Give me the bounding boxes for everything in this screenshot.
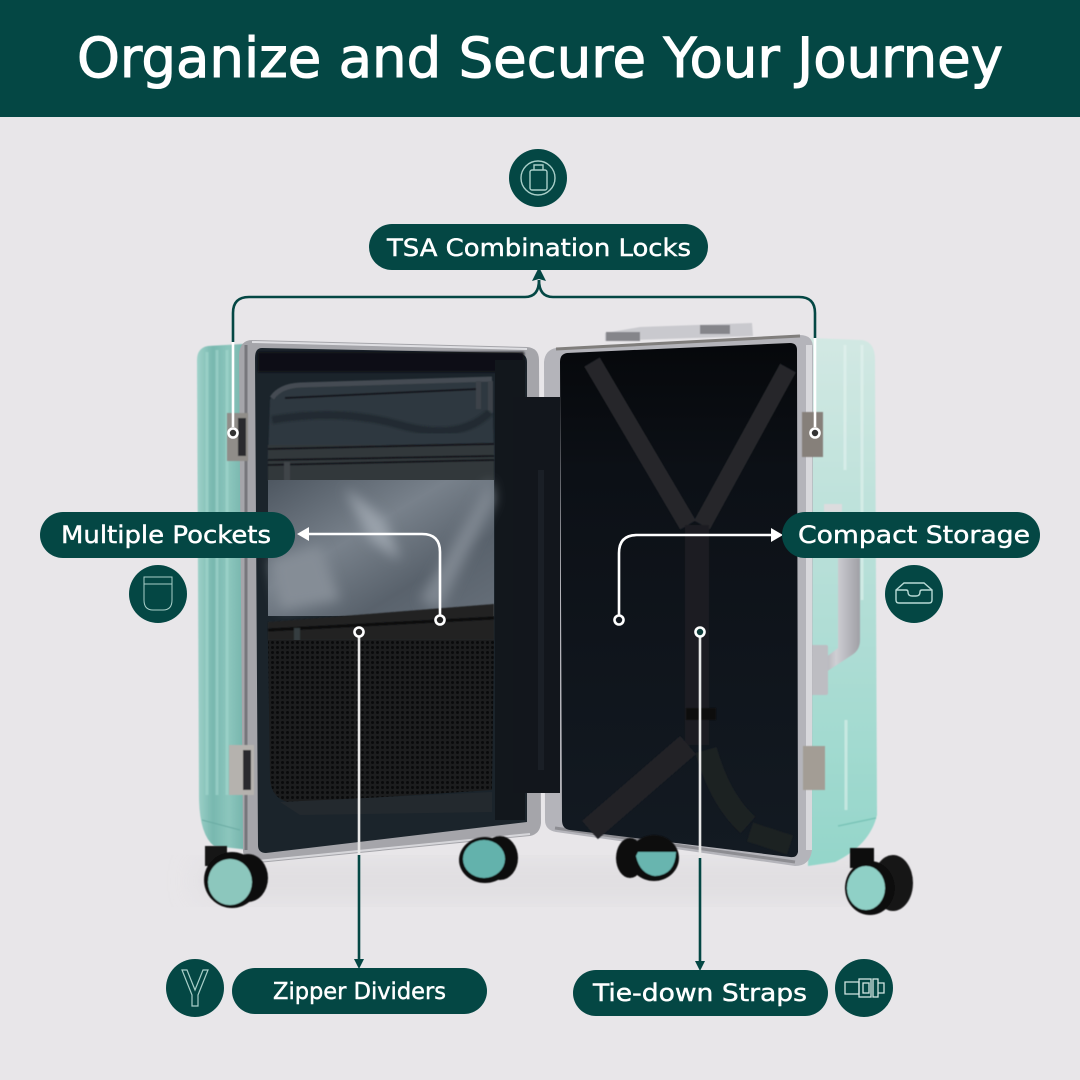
label: Tie-down Straps bbox=[573, 970, 828, 1016]
right shell bbox=[808, 338, 877, 866]
label: Tie-down Straps: Tie-down Straps bbox=[592, 979, 807, 1007]
icon: zipper bbox=[166, 959, 224, 1017]
label: Compact Storage bbox=[782, 512, 1040, 558]
label: TSA Combination Locks: TSA Combination Locks bbox=[386, 234, 691, 262]
suitcase bbox=[197, 323, 913, 915]
side handle bbox=[808, 504, 860, 695]
connector: compact storage bbox=[614, 528, 783, 624]
icon: storage tray bbox=[885, 565, 943, 623]
label: TSA Combination Locks bbox=[369, 224, 708, 270]
lower zipper band bbox=[268, 604, 494, 656]
label: Multiple Pockets: Multiple Pockets bbox=[61, 521, 271, 549]
connector: zipper dividers bbox=[354, 628, 364, 969]
label: Multiple Pockets bbox=[40, 512, 295, 558]
label: Zipper Dividers bbox=[232, 968, 487, 1014]
mesh pocket bbox=[268, 640, 494, 815]
icon: strap buckle bbox=[835, 959, 893, 1017]
latches bbox=[227, 412, 825, 795]
icon: luggage bag bbox=[509, 149, 567, 207]
telescopic handle top bbox=[605, 323, 753, 341]
right interior bbox=[560, 343, 798, 857]
right half frame bbox=[544, 335, 813, 866]
tie-down straps bbox=[590, 362, 790, 845]
title: Organize and Secure Your Journey bbox=[77, 26, 1003, 90]
label: Compact Storage: Compact Storage bbox=[798, 521, 1030, 549]
upper zip pocket bbox=[268, 378, 494, 460]
header band bbox=[0, 0, 1080, 117]
wheels bbox=[204, 835, 913, 915]
icon: pocket bbox=[129, 565, 187, 623]
left interior bbox=[255, 348, 527, 853]
center flap bbox=[513, 397, 560, 793]
connector: multiple pockets bbox=[297, 527, 444, 624]
left half frame bbox=[239, 340, 541, 863]
middle zipper band bbox=[268, 444, 494, 490]
connector: TSA bracket bbox=[228, 267, 820, 438]
label: Zipper Dividers: Zipper Dividers bbox=[273, 979, 446, 1005]
connector: tie-down straps bbox=[695, 628, 705, 971]
left shell bbox=[197, 344, 250, 850]
floor shadow bbox=[200, 868, 880, 894]
clear plastic pocket bbox=[268, 480, 494, 616]
